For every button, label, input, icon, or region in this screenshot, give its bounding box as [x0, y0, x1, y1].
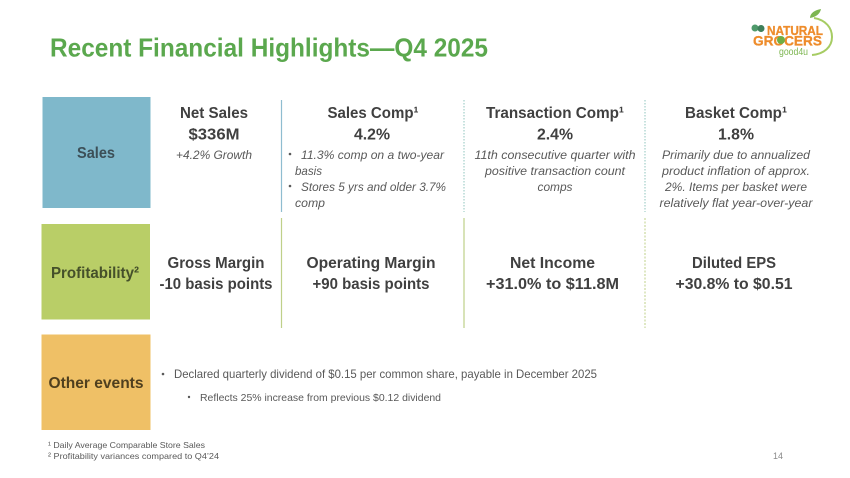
metric: transaction comp: positive transaction count — [484, 164, 626, 178]
footnotes: ¹ Daily Average Comparable Store Sales — [48, 440, 205, 450]
divider: sales 3 — [644, 100, 646, 212]
metric: diluted eps — [676, 255, 793, 293]
logo: Natural Grocers: good4u — [779, 47, 808, 58]
text block: other events: Reflects 25% increase from previous $0.12 dividend — [200, 392, 441, 404]
divider: profitability 2 — [463, 218, 465, 328]
metric: operating margin: +90 basis points — [312, 276, 430, 293]
metric: transaction comp: comps — [538, 180, 572, 194]
metric: basket comp: product inflation of approx. — [661, 164, 810, 178]
logo: Natural Grocers: GROCERS — [753, 32, 822, 48]
metric: diluted eps: +30.8% to $0.51 — [676, 276, 793, 293]
metric: gross margin — [160, 255, 273, 293]
metric: net income — [486, 255, 619, 293]
metric: transaction comp: 11th consecutive quarter with — [474, 148, 636, 162]
metric: sales comp: 11.3% comp on a two-year — [301, 148, 445, 162]
metric: basket comp: Basket Comp¹ — [685, 105, 787, 122]
metric: basket comp: relatively flat year-over-year — [660, 196, 814, 210]
metric: net sales: $336M — [188, 126, 240, 144]
panel: profitability label — [42, 224, 150, 320]
footnotes: ² Profitability variances compared to Q4’24 — [48, 451, 219, 461]
metric: sales comp: comp — [295, 196, 325, 210]
metric: net sales: Net Sales — [180, 105, 248, 122]
divider: profitability 1 — [280, 218, 282, 328]
page number: 14 — [773, 451, 783, 462]
metric: sales comp: Sales Comp¹ — [328, 105, 418, 122]
metric: basket comp: 2%. Items per basket were — [664, 180, 807, 194]
metric: transaction comp — [474, 105, 636, 194]
metric: basket comp: 1.8% — [718, 126, 754, 144]
metric: basket comp — [660, 105, 814, 210]
metric: diluted eps: Diluted EPS — [692, 255, 776, 272]
metric: basket comp: Primarily due to annualized — [662, 148, 810, 162]
metric: net income: Net Income — [510, 255, 595, 272]
metric: operating margin — [306, 255, 436, 293]
metric: net sales: +4.2% Growth — [176, 148, 252, 162]
metric: operating margin: Operating Margin — [306, 255, 436, 272]
metric: sales comp — [289, 105, 446, 210]
metric: gross margin: -10 basis points — [160, 276, 273, 293]
panel: other events label — [42, 334, 150, 430]
metric: sales comp: Stores 5 yrs and older 3.7% — [301, 180, 446, 194]
metric: sales comp: basis — [295, 164, 322, 178]
metric: sales comp: 4.2% — [354, 126, 390, 144]
divider: profitability 3 — [644, 218, 646, 328]
divider: sales 2 — [463, 100, 465, 212]
title: Recent Financial Highlights—Q4 2025 — [50, 32, 488, 62]
logo: Natural Grocers: NATURAL — [767, 23, 823, 38]
metric: net sales — [176, 105, 252, 162]
panel: sales label: Sales — [77, 145, 115, 162]
panel: other events label: Other events — [48, 375, 144, 392]
panel: profitability label: Profitability² — [51, 265, 139, 282]
metric: transaction comp: Transaction Comp¹ — [486, 105, 624, 122]
divider: sales 1 — [280, 100, 282, 212]
footnotes — [48, 440, 219, 461]
text block: other events: Declared quarterly dividend of $0.15 per common share, payable in December 2025 — [174, 367, 597, 381]
panel: sales label — [42, 97, 150, 208]
metric: gross margin: Gross Margin — [168, 255, 264, 272]
text block: other events — [162, 367, 597, 404]
logo: Natural Grocers — [752, 9, 832, 58]
metric: net income: +31.0% to $11.8M — [486, 276, 619, 293]
metric: transaction comp: 2.4% — [537, 126, 573, 144]
